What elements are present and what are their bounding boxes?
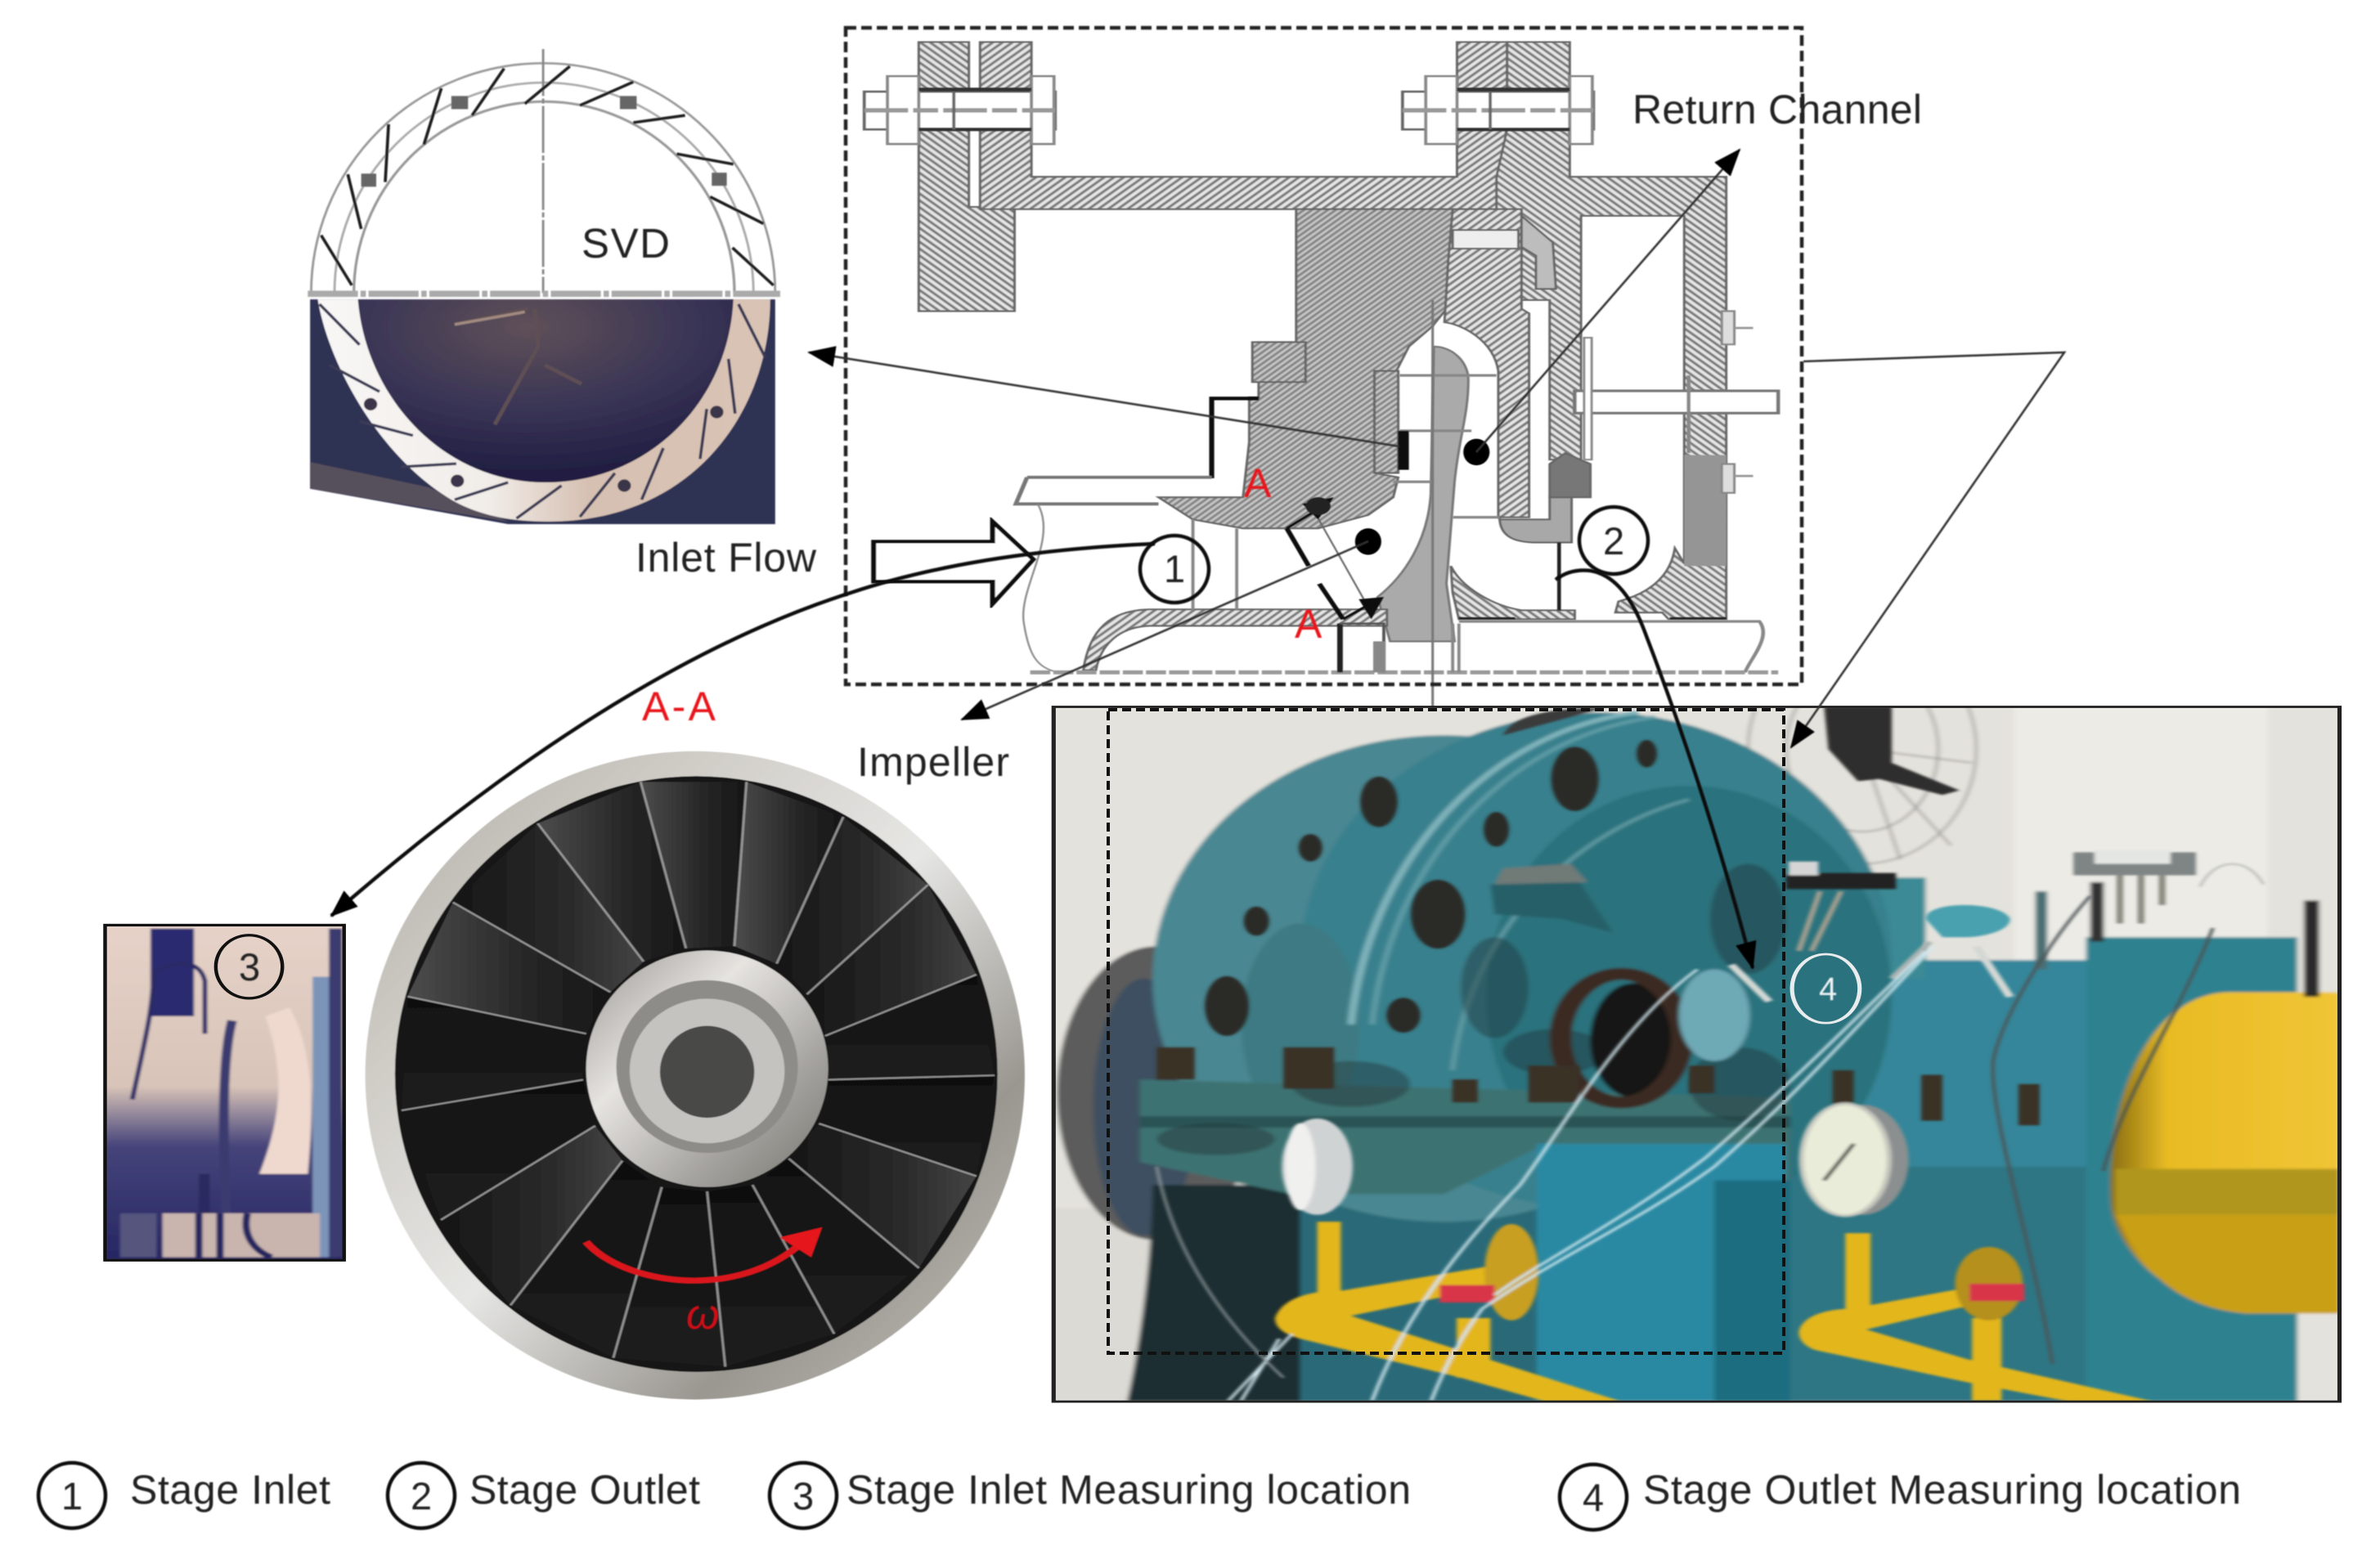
legend 2: [388, 1463, 700, 1528]
measuring point dots: [1355, 439, 1489, 555]
wall: [1053, 706, 2339, 1401]
impeller blades: [402, 782, 995, 1366]
impeller rim: [366, 751, 1025, 1400]
rotation arrow: [586, 1227, 822, 1280]
arrow: to return channel: [1476, 150, 1740, 452]
bolts and white passages: [864, 76, 1778, 711]
legend 2: Stage Outlet: [469, 1467, 700, 1513]
fan hub and blades: [1824, 706, 1960, 795]
digit 4 in photo: 4: [1819, 971, 1837, 1007]
digit 2: 2: [1603, 519, 1624, 563]
SVD photograph: [310, 299, 775, 524]
panel: inlet measuring location photograph: [105, 925, 344, 1260]
seal block: [1550, 453, 1591, 497]
small bolt: [1252, 342, 1305, 382]
base flange: [1140, 1079, 1790, 1194]
legend 3: Stage Inlet Measuring location: [846, 1467, 1411, 1513]
return bend: [1500, 497, 1572, 542]
label SVD: SVD: [582, 220, 670, 267]
text labels: [239, 87, 1922, 1339]
inlet shroud: [1084, 609, 1387, 670]
label return channel: Return Channel: [1632, 87, 1922, 132]
upper casing: [980, 129, 1506, 209]
curved arrow: stage outlet to location 4: [1556, 570, 1753, 968]
SVD line drawing: [308, 49, 780, 294]
legend 4: Stage Outlet Measuring location: [1643, 1467, 2241, 1513]
inlet flow hollow arrow: [873, 522, 1033, 603]
label inlet flow: Inlet Flow: [635, 535, 817, 581]
panel: test rig photograph: [1053, 635, 2339, 1401]
main casing discs: [1150, 733, 1538, 1223]
digit 3 in photo: 3: [239, 945, 260, 989]
circle marker 3: [216, 935, 282, 998]
left flange: [918, 42, 1031, 311]
digit 1: 1: [1164, 547, 1185, 590]
right dark post: [2304, 900, 2319, 997]
yellow tank: [2110, 993, 2339, 1297]
valve dome: [1925, 905, 2010, 937]
fan guard: [1748, 635, 1976, 863]
return channel upper piece: [1521, 216, 1556, 289]
legend 1: Stage Inlet: [130, 1467, 330, 1513]
centre casing: [1158, 209, 1453, 528]
legend 4: [1560, 1464, 2241, 1530]
legend 1: 1: [61, 1474, 83, 1518]
pipe flanges: [1439, 1224, 2024, 1321]
lower right casing: [1615, 413, 1727, 619]
legend 3: 3: [793, 1474, 814, 1518]
casing stains: [1156, 863, 1790, 1155]
impeller blade disc: [395, 776, 998, 1372]
label A upper: A: [1244, 460, 1272, 506]
transmitter manifold: [1786, 850, 2196, 951]
arrow: to SVD: [809, 352, 1399, 446]
lower dark region: [1125, 1182, 1305, 1401]
base bolts: [1156, 1047, 2040, 1125]
section line A-A: [1287, 497, 1384, 619]
label omega: ω: [686, 1291, 720, 1339]
pedestal: [1537, 1144, 1786, 1401]
right flange: [1457, 42, 1727, 460]
label A-A: A-A: [642, 684, 716, 729]
legend 1: [38, 1463, 330, 1528]
circle marker 4: [1792, 954, 1860, 1023]
casing bolt holes: [1205, 740, 1657, 1036]
legend: [38, 1463, 2241, 1530]
connector lines from section to photo: [1791, 352, 2064, 747]
legend 3: [770, 1463, 1411, 1528]
diffuser plate: [1444, 209, 1529, 518]
right structures: [1785, 1164, 2090, 1401]
thermocouple wires: [1228, 946, 1934, 1401]
panel: SVD drawing and photo: [308, 49, 780, 524]
legend 4: 4: [1583, 1476, 1604, 1519]
circle marker 2: [1579, 507, 1648, 574]
panel: cross-section drawing: [864, 42, 1778, 711]
photo frame: [1053, 706, 2339, 1401]
wedge lug: [1489, 881, 1611, 931]
label A lower: A: [1295, 601, 1322, 647]
section outline dashed box: [846, 28, 1802, 684]
impeller section: [1377, 347, 1468, 641]
pressure gauges: [1282, 1104, 1909, 1216]
dark shaft hole: [1590, 983, 1678, 1098]
circle marker 1: [1140, 536, 1209, 603]
label impeller: Impeller: [857, 739, 1009, 785]
motor end: [1057, 946, 1256, 1240]
lower hub: [1451, 566, 1574, 619]
legend 2: 2: [411, 1474, 432, 1518]
impeller hub: [586, 950, 829, 1187]
yellow pipes: [1275, 1222, 2153, 1401]
panel: impeller photograph: [366, 751, 1025, 1400]
curved arrow: stage inlet to location 3: [331, 544, 1155, 916]
inner dashed box on photo: [1108, 710, 1784, 1353]
arrow: to impeller: [962, 541, 1368, 720]
casing bolt: [1453, 230, 1519, 249]
